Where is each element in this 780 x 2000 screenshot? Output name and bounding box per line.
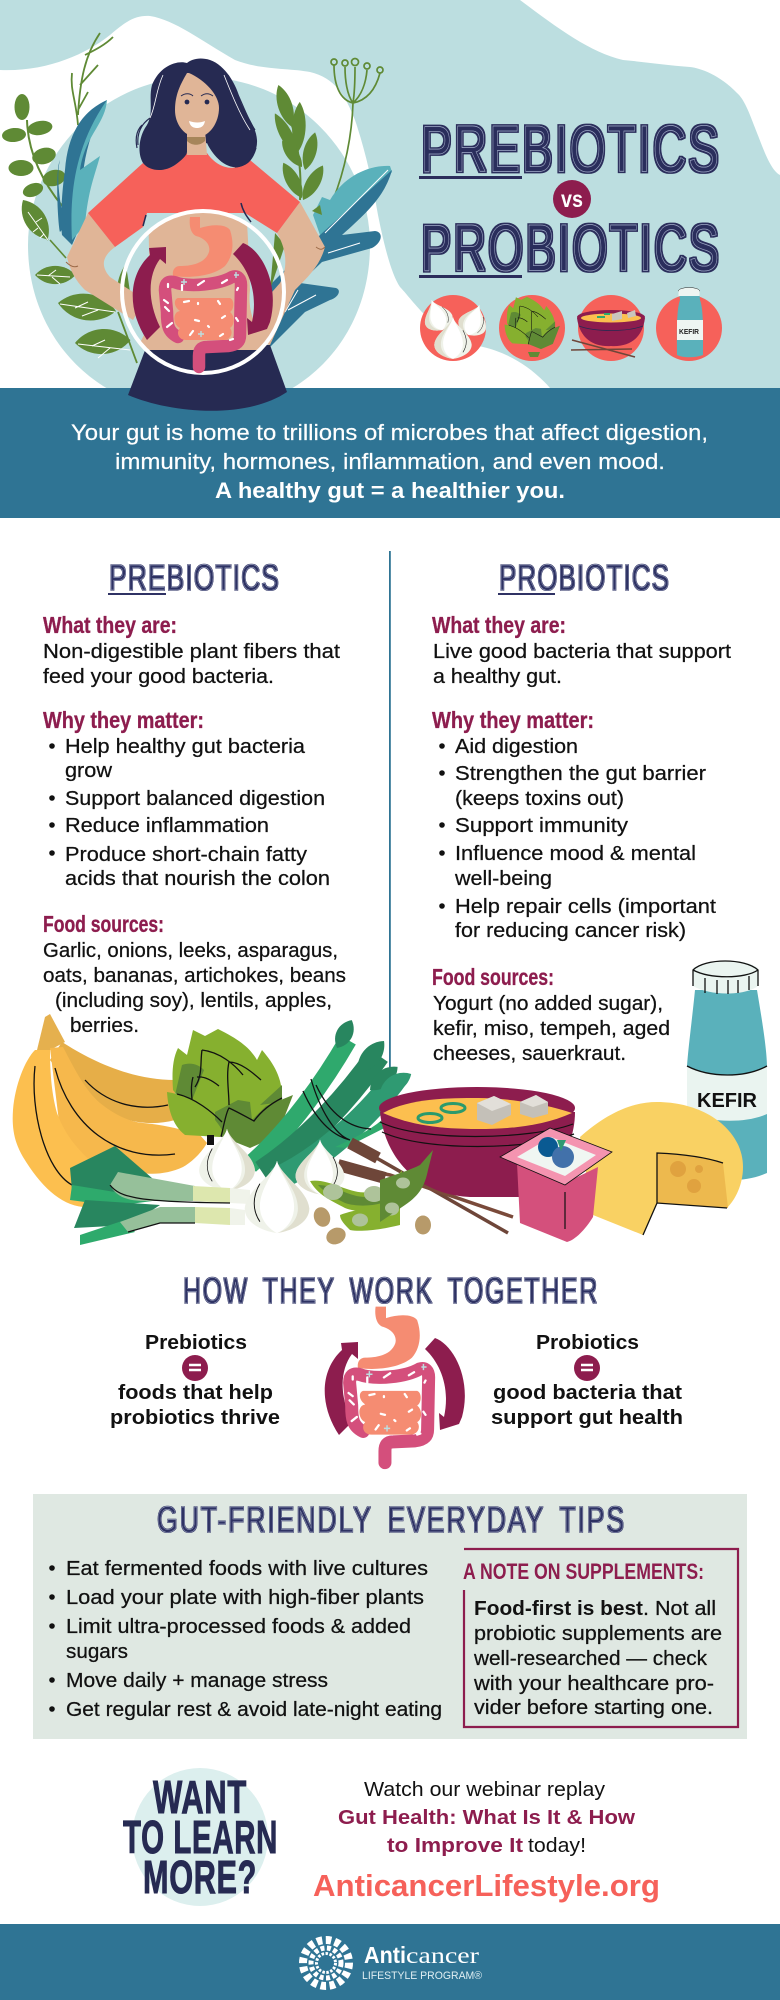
callout: probiotics equation bbox=[491, 1332, 683, 1429]
what they are: a healthy gut. bbox=[433, 666, 562, 688]
why they matter: Support immunity bbox=[455, 815, 628, 837]
panel: probiotics column bbox=[432, 557, 731, 1065]
background blob bbox=[0, 0, 780, 388]
intro text: A healthy gut = a healthier you. bbox=[215, 478, 565, 503]
callout: probiotics equation: good bacteria that bbox=[493, 1382, 682, 1404]
leeks bbox=[70, 1146, 250, 1245]
callout: supplements note: probiotic supplements are bbox=[474, 1623, 722, 1645]
intro text bbox=[71, 420, 708, 503]
digestive tract bbox=[164, 217, 241, 367]
panel: prebiotics column bbox=[43, 557, 346, 1037]
webinar text: to Improve It bbox=[387, 1835, 523, 1857]
why they matter: Help repair cells (important bbox=[455, 896, 716, 918]
what they are bbox=[432, 612, 731, 688]
icon: gut with arrows bbox=[325, 1307, 465, 1463]
chopsticks bbox=[338, 1143, 513, 1233]
heading: tips: GUT-FRIENDLY EVERYDAY TIPS bbox=[157, 1499, 626, 1540]
soy beans bbox=[310, 1150, 433, 1247]
intro text: immunity, hormones, inflammation, and even mood. bbox=[115, 449, 665, 474]
heading: probiotics: PROBIOTICS bbox=[499, 557, 670, 598]
webinar text: Watch our webinar replay bbox=[364, 1779, 605, 1801]
callout: supplements note: vider before starting one. bbox=[474, 1697, 713, 1719]
woman illustration bbox=[66, 59, 325, 411]
callout: probiotics equation: Probiotics bbox=[536, 1332, 639, 1354]
food illustration bbox=[13, 960, 767, 1247]
tips list: Move daily + manage stress bbox=[66, 1670, 328, 1692]
hair bbox=[139, 59, 257, 170]
heading: how they work together: HOW THEY WORK TOGETHER bbox=[183, 1270, 599, 1311]
callout: prebiotics equation: probiotics thrive bbox=[110, 1407, 280, 1429]
vs badge bbox=[553, 180, 591, 218]
tips list: Limit ultra-processed foods & added bbox=[66, 1616, 411, 1638]
miso bowl bbox=[379, 1087, 575, 1197]
callout: supplements note: with your healthcare pro- bbox=[473, 1673, 714, 1695]
front garlic bbox=[245, 1161, 309, 1233]
callout: supplements note bbox=[463, 1549, 738, 1727]
why they matter: Why they matter: bbox=[432, 707, 594, 733]
callout: supplements note: A NOTE ON SUPPLEMENTS: bbox=[463, 1559, 704, 1584]
yogurt cup bbox=[500, 1128, 612, 1242]
plants right bbox=[255, 58, 392, 347]
callout: supplements note: Food-first is best bbox=[474, 1598, 643, 1620]
belly ring bbox=[122, 211, 284, 373]
arms bbox=[67, 202, 325, 345]
logo wordmark: Anti bbox=[364, 1942, 406, 1968]
logo wordmark bbox=[362, 1942, 482, 1982]
kefir bottle: KEFIR bbox=[697, 1090, 758, 1112]
why they matter bbox=[432, 707, 716, 942]
why they matter bbox=[43, 707, 330, 890]
kefir bottle bbox=[687, 960, 767, 1180]
callout: prebiotics equation bbox=[110, 1332, 280, 1429]
artichoke bbox=[167, 1029, 293, 1148]
icon: miso bowl bbox=[571, 295, 645, 361]
food sources: (including soy), lentils, apples, bbox=[55, 990, 332, 1012]
plants left bbox=[1, 33, 137, 363]
intro text: Your gut is home to trillions of microbes that affect digestion, bbox=[71, 420, 708, 445]
logo mark bbox=[303, 1940, 349, 1986]
bananas bbox=[13, 1014, 207, 1207]
footer bar bbox=[0, 1924, 780, 2000]
callout: prebiotics equation: foods that help bbox=[118, 1382, 273, 1404]
callout: supplements note: . Not all bbox=[643, 1598, 716, 1620]
asparagus bbox=[250, 1016, 415, 1180]
main title bbox=[419, 112, 721, 284]
why they matter: Help healthy gut bacteria bbox=[65, 736, 306, 758]
icon: kefir bottle: KEFIR bbox=[679, 327, 700, 336]
food sources bbox=[43, 911, 346, 1037]
food sources bbox=[432, 964, 670, 1065]
logo wordmark: cancer bbox=[406, 1943, 479, 1968]
why they matter: for reducing cancer risk) bbox=[455, 920, 686, 942]
icon: artichoke bbox=[499, 295, 565, 361]
icon: garlic bbox=[418, 295, 493, 361]
background circle bbox=[28, 77, 370, 413]
heading: prebiotics: PREBIOTICS bbox=[109, 557, 280, 598]
tips list: Get regular rest & avoid late-night eating bbox=[66, 1699, 442, 1721]
callout: prebiotics equation: Prebiotics bbox=[145, 1332, 247, 1354]
food sources: Food sources: bbox=[432, 964, 554, 990]
circular arrows bbox=[133, 243, 273, 340]
callout: want to learn more: MORE? bbox=[143, 1851, 257, 1903]
why they matter: well-being bbox=[454, 868, 552, 890]
tips list: Load your plate with high-fiber plants bbox=[66, 1587, 424, 1609]
webinar text: today! bbox=[528, 1835, 586, 1857]
column divider bbox=[389, 551, 391, 1101]
food sources: Garlic, onions, leeks, asparagus, bbox=[43, 940, 338, 962]
food sources: kefir, miso, tempeh, aged bbox=[433, 1018, 670, 1040]
what they are: feed your good bacteria. bbox=[43, 666, 274, 688]
why they matter: Aid digestion bbox=[455, 736, 578, 758]
what they are: Non-digestible plant fibers that bbox=[43, 641, 340, 663]
torso inside circle bbox=[141, 213, 263, 350]
garlic bulbs bbox=[199, 1129, 344, 1194]
food sources: Food sources: bbox=[43, 911, 164, 937]
panel: tips bbox=[33, 1494, 747, 1739]
why they matter: Influence mood & mental bbox=[455, 843, 696, 865]
what they are: What they are: bbox=[432, 612, 566, 638]
why they matter: (keeps toxins out) bbox=[455, 788, 624, 810]
logo wordmark: LIFESTYLE PROGRAM® bbox=[362, 1970, 482, 1982]
webinar text bbox=[338, 1779, 635, 1857]
neck and face bbox=[187, 130, 207, 155]
tips list: sugars bbox=[66, 1641, 128, 1663]
website link: AnticancerLifestyle.org bbox=[313, 1868, 660, 1903]
why they matter: Produce short-chain fatty bbox=[65, 844, 307, 866]
why they matter: grow bbox=[65, 760, 113, 782]
what they are: Live good bacteria that support bbox=[433, 641, 731, 663]
callout: want to learn more: WANT bbox=[153, 1771, 247, 1823]
why they matter: Support balanced digestion bbox=[65, 788, 325, 810]
food sources: oats, bananas, artichokes, beans bbox=[43, 965, 346, 987]
callout: probiotics equation: support gut health bbox=[491, 1407, 683, 1429]
why they matter: Reduce inflammation bbox=[65, 815, 269, 837]
icon: kefir bottle bbox=[656, 288, 722, 361]
why they matter: Why they matter: bbox=[43, 707, 204, 733]
shirt bbox=[88, 153, 300, 247]
callout: want to learn more: TO LEARN bbox=[123, 1811, 278, 1863]
cheese bbox=[580, 1102, 743, 1235]
what they are: What they are: bbox=[43, 612, 177, 638]
tips list: Eat fermented foods with live cultures bbox=[66, 1558, 428, 1580]
food sources: berries. bbox=[70, 1015, 139, 1037]
what they are bbox=[43, 612, 340, 688]
food sources: Yogurt (no added sugar), bbox=[433, 993, 663, 1015]
why they matter: Strengthen the gut barrier bbox=[455, 763, 706, 785]
food sources: cheeses, sauerkraut. bbox=[433, 1043, 626, 1065]
why they matter: acids that nourish the colon bbox=[65, 868, 330, 890]
callout: supplements note: well-researched — check bbox=[473, 1648, 708, 1670]
skirt bbox=[128, 345, 287, 411]
main title: vs bbox=[561, 186, 583, 212]
tips list bbox=[49, 1558, 442, 1721]
callout: want to learn more bbox=[123, 1768, 278, 1906]
webinar text: Gut Health: What Is It & How bbox=[338, 1807, 635, 1829]
teal banner bbox=[0, 388, 780, 518]
